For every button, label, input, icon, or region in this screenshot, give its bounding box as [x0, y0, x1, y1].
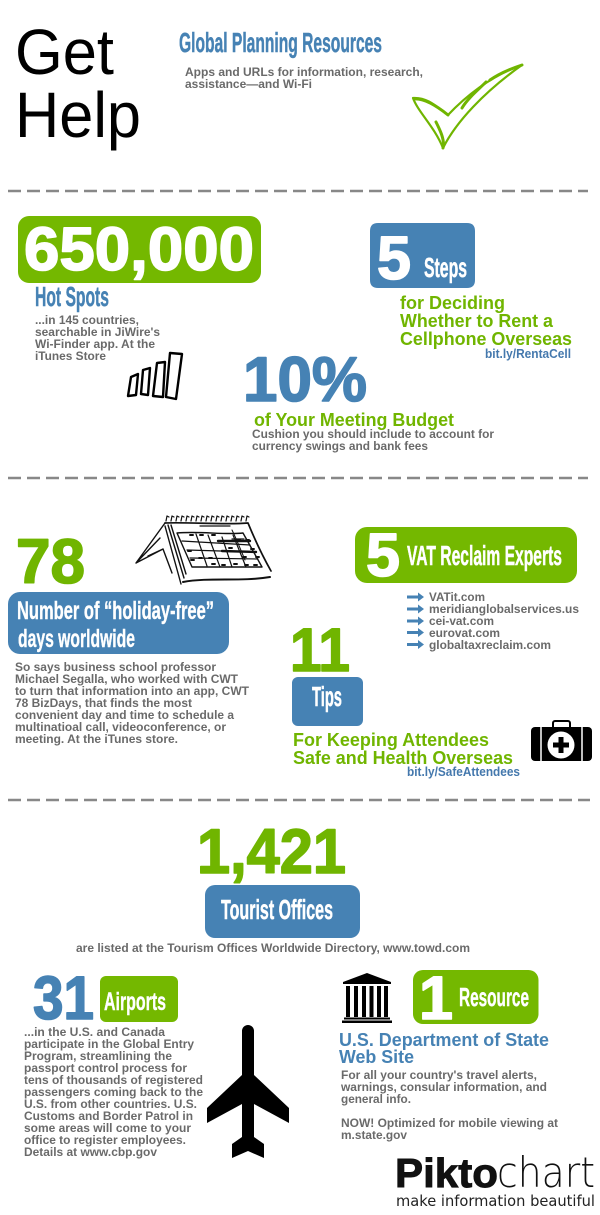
icon: green check mark [413, 65, 522, 148]
state department description [340, 1068, 558, 1142]
value: 5: 5 [366, 521, 400, 589]
state department description: warnings, consular information, and [340, 1080, 547, 1094]
list: VAT expert websites: globaltaxreclaim.com [429, 638, 551, 652]
heading: U.S. Department of State Web Site: Web Site [339, 1047, 414, 1067]
panel: Airports [100, 976, 178, 1022]
airports description: participate in the Global Entry [24, 1037, 194, 1051]
value: 5: 5 [377, 224, 411, 292]
list: VAT expert websites [407, 590, 579, 652]
icon: government building [342, 973, 392, 1023]
holiday-free description: to turn that information into an app, CWT [15, 684, 250, 698]
list: VAT expert websites: eurovat.com [429, 626, 500, 640]
holiday-free description: 78 BizDays, that finds the most [15, 696, 192, 710]
hot spots description: Wi-Finder app. At the [35, 337, 155, 351]
holiday-free description [15, 660, 250, 746]
tourist offices description: are listed at the Tourism Offices Worldwide Directory, www.towd.com [76, 941, 470, 955]
label: Steps: Steps [424, 252, 467, 283]
panel: Tips: Tips [312, 681, 342, 712]
state department description: m.state.gov [341, 1128, 407, 1142]
airports description: passport control process for [24, 1061, 187, 1075]
state department description: general info. [341, 1092, 411, 1106]
panel: holiday-free days [8, 592, 229, 654]
holiday-free description: meeting. At the iTunes store. [15, 732, 178, 746]
panel: Tourist Offices [205, 885, 360, 938]
holiday-free description: multinatioal call, videoconference, or [15, 720, 226, 734]
hot spots description [35, 313, 160, 363]
value: 650,000: 650,000 [24, 215, 254, 283]
intro text: assistance—and Wi-Fi [185, 77, 312, 91]
link: bit.ly/RentaCell: bit.ly/RentaCell [485, 347, 571, 361]
heading: U.S. Department of State Web Site [339, 1030, 549, 1067]
logo: Piktochart [395, 1148, 595, 1210]
stat: 78 holiday-free days: 78 [16, 527, 85, 597]
airports description: U.S. from other countries. U.S. [24, 1097, 197, 1111]
label: Resource: Resource [459, 982, 529, 1012]
list: VAT expert websites: meridianglobalservices.us [429, 602, 579, 616]
stat: 1,421 tourist offices: 1,421 [197, 817, 346, 887]
icon: airplane [207, 1025, 289, 1158]
hot spots description: iTunes Store [35, 349, 106, 363]
heading: Hot Spots: Hot Spots [35, 281, 109, 312]
stat: 31 airports: 31 [33, 964, 94, 1032]
intro text [185, 65, 423, 91]
airports description: some areas will come to your [24, 1121, 191, 1135]
airports description: Details at www.cbp.gov [24, 1145, 157, 1159]
budget description: Cushion you should include to account for [252, 427, 494, 441]
heading: keeping attendees safe [293, 730, 513, 768]
stat: 5 steps [370, 223, 572, 361]
stat: 11 tips: 11 [290, 616, 350, 684]
panel: Tips [292, 677, 363, 726]
stat: 10 percent: 10% [243, 345, 367, 415]
heading: of your meeting budget: of Your Meeting Budget [254, 410, 454, 430]
holiday-free description: So says business school professor [15, 660, 216, 674]
intro text: Apps and URLs for information, research, [185, 65, 423, 79]
logo: Piktochart: Pikto [395, 1150, 498, 1196]
stat: 31 airports [24, 964, 289, 1159]
stat: 650,000 hot spots [18, 215, 261, 399]
state department description: NOW! Optimized for mobile viewing at [341, 1116, 558, 1130]
airports description: tens of thousands of registered [24, 1073, 203, 1087]
panel: Airports: Airports [104, 988, 166, 1016]
stat: 11 tips [290, 616, 592, 779]
hot spots description: searchable in JiWire's [35, 325, 160, 339]
title: Get Help [15, 16, 141, 151]
title: Get Help: Help [15, 79, 141, 151]
title: Get Help: Get [15, 16, 114, 88]
icon: signal bars [128, 353, 182, 399]
holiday-free description: convenient day and time to schedule a [15, 708, 234, 722]
hot spots description: ...in 145 countries, [35, 313, 139, 327]
airports description: Program, streamlining the [24, 1049, 172, 1063]
logo tagline: make information beautiful [396, 1192, 595, 1210]
airports description [24, 1025, 203, 1159]
panel: Tourist Offices: Tourist Offices [221, 894, 333, 925]
heading: renting a cellphone [400, 293, 572, 349]
list: VAT expert websites: cei-vat.com [429, 614, 494, 628]
budget description [252, 427, 494, 453]
value: 1: 1 [419, 964, 453, 1032]
heading: U.S. Department of State Web Site: U.S. Department of State [339, 1030, 549, 1050]
heading: Global Planning Resources: Global Planning Resources [179, 27, 382, 58]
panel: holiday-free days: days worldwide [18, 625, 135, 653]
holiday-free description: Michael Segalla, who worked with CWT [15, 672, 239, 686]
airports description: office to register employees. [24, 1133, 186, 1147]
heading: renting a cellphone: Cellphone Overseas [400, 329, 572, 349]
icon: medical kit [531, 721, 592, 761]
stat: 1 resource [339, 964, 558, 1142]
stat: 10 percent [243, 345, 494, 453]
budget description: currency swings and bank fees [252, 439, 428, 453]
link: bit.ly/SafeAttendees: bit.ly/SafeAttendees [407, 765, 520, 779]
heading: keeping attendees safe: Safe and Health Overseas [293, 748, 513, 768]
list: VAT expert websites: VATit.com [429, 590, 485, 604]
stat: 78 holiday-free days [8, 516, 271, 746]
icon: sketched calendar [136, 516, 271, 584]
airports description: Customs and Border Patrol in [24, 1109, 193, 1123]
state department description: For all your country's travel alerts, [341, 1068, 537, 1082]
stat: 1,421 tourist offices [76, 817, 470, 955]
heading: keeping attendees safe: For Keeping Attendees [293, 730, 489, 750]
panel: holiday-free days: Number of “holiday-free” [17, 597, 214, 625]
heading: renting a cellphone: for Deciding [400, 293, 505, 313]
heading: renting a cellphone: Whether to Rent a [400, 311, 554, 331]
airports description: ...in the U.S. and Canada [24, 1025, 165, 1039]
stat: 5 VAT reclaim experts [355, 521, 579, 652]
airports description: passengers coming back to the [24, 1085, 203, 1099]
